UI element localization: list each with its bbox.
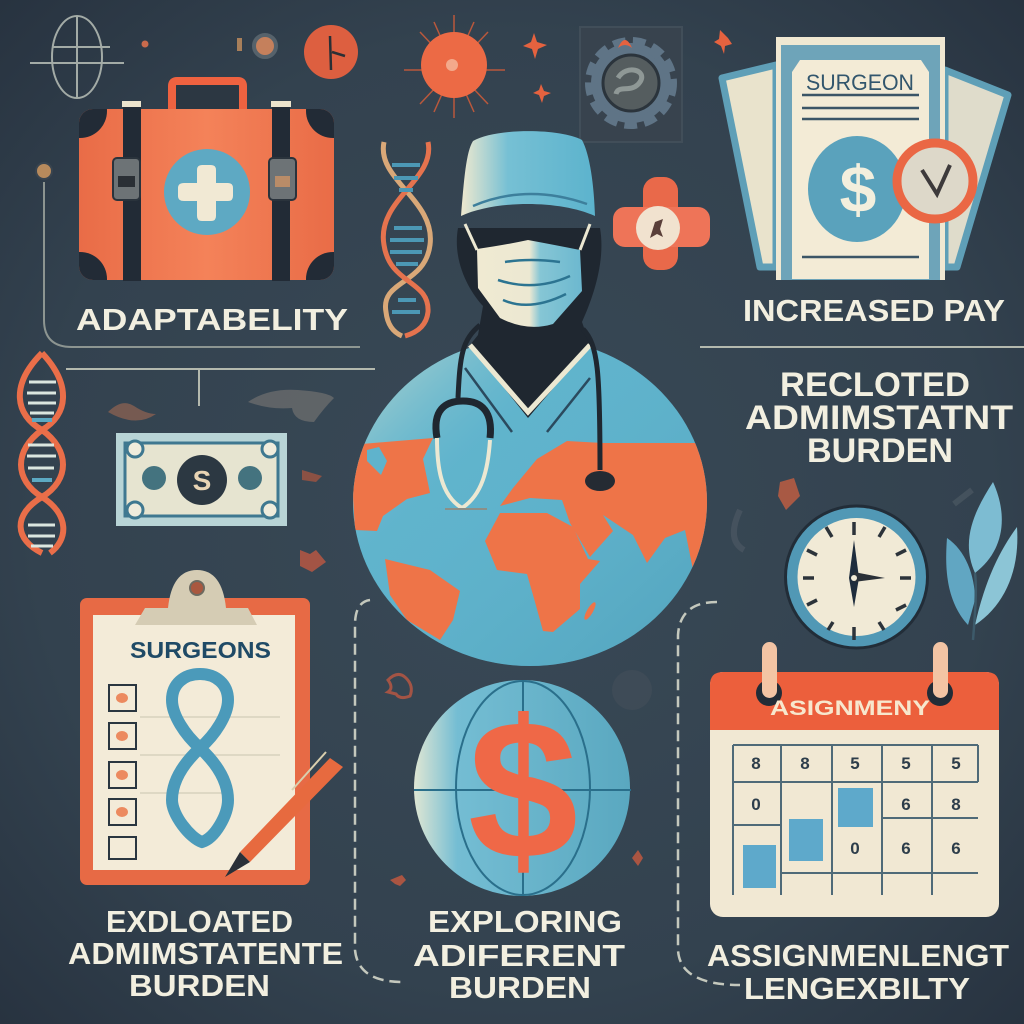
globe [350,338,712,666]
stethoscope [436,325,615,509]
icon: clipboard: SURGEONS [130,637,271,663]
icon: pay documents: $ [840,152,876,226]
surgical cap [461,131,595,216]
icon: calendar: 6 [951,839,961,858]
surgical mask [465,224,590,327]
icon: dollar globe [414,679,631,900]
icon: DNA top [383,142,430,336]
label: reduced burden: RECLOTED [780,366,970,404]
label: assignment flexibility [707,938,1009,1006]
label: assignment flexibility: ASSIGNMENLENGT [707,938,1009,973]
icon: medical suitcase [79,77,334,281]
decorative top icons [30,15,732,142]
icon: clipboard [80,570,343,885]
icon: calendar: 8 [951,795,961,814]
decorative smudges [108,390,972,886]
icon: leaf [946,482,1017,640]
globe with surgeon [350,131,712,666]
icon: pay documents: SURGEON [806,70,914,95]
label: exploited burden: EXDLOATED [106,904,293,939]
right connector [678,602,740,985]
label: increased pay: INCREASED PAY [743,293,1005,328]
icon: calendar: 5 [901,754,911,773]
icon: DNA left [20,353,63,553]
icon: calendar: 8 [751,754,761,773]
icon: banknote: S [193,465,211,496]
icon: calendar [710,642,999,917]
icon: calendar: 0 [850,839,860,858]
label: reduced burden: BURDEN [807,432,953,470]
label: reduced burden [745,366,1013,470]
icon: calendar: 6 [901,839,911,858]
center connector [355,600,403,982]
icon: calendar: 6 [901,795,911,814]
icon: dollar globe: $ [468,679,578,900]
label: assignment flexibility: LENGEXBILTY [744,971,970,1006]
label: exploited burden: BURDEN [129,968,270,1003]
right divider [700,346,1024,348]
icon: calendar: 8 [800,754,810,773]
scrubs collar [465,345,590,432]
icon: calendar: 0 [751,795,761,814]
head and neck [457,228,601,418]
icon: calendar: 5 [951,754,961,773]
label: exploring burden: BURDEN [449,970,591,1005]
label: adaptability: ADAPTABELITY [76,302,348,337]
label: reduced burden: ADMIMSTATNT [745,399,1013,437]
icon: pay documents [722,37,1008,280]
left connector line [36,163,375,406]
icon: banknote [116,433,287,526]
label: exploited burden: ADMIMSTATENTE [68,936,343,971]
icon: cross with cracks [613,177,710,270]
label: exploited burden [68,904,343,1003]
icon: clock [786,506,928,648]
label: exploring burden: EXPLORING [428,904,622,939]
icon: calendar: 5 [850,754,860,773]
label: exploring burden: ADIFERENT [413,938,625,973]
label: exploring burden [413,904,625,1005]
icon: calendar: ASIGNMENY [770,697,930,720]
